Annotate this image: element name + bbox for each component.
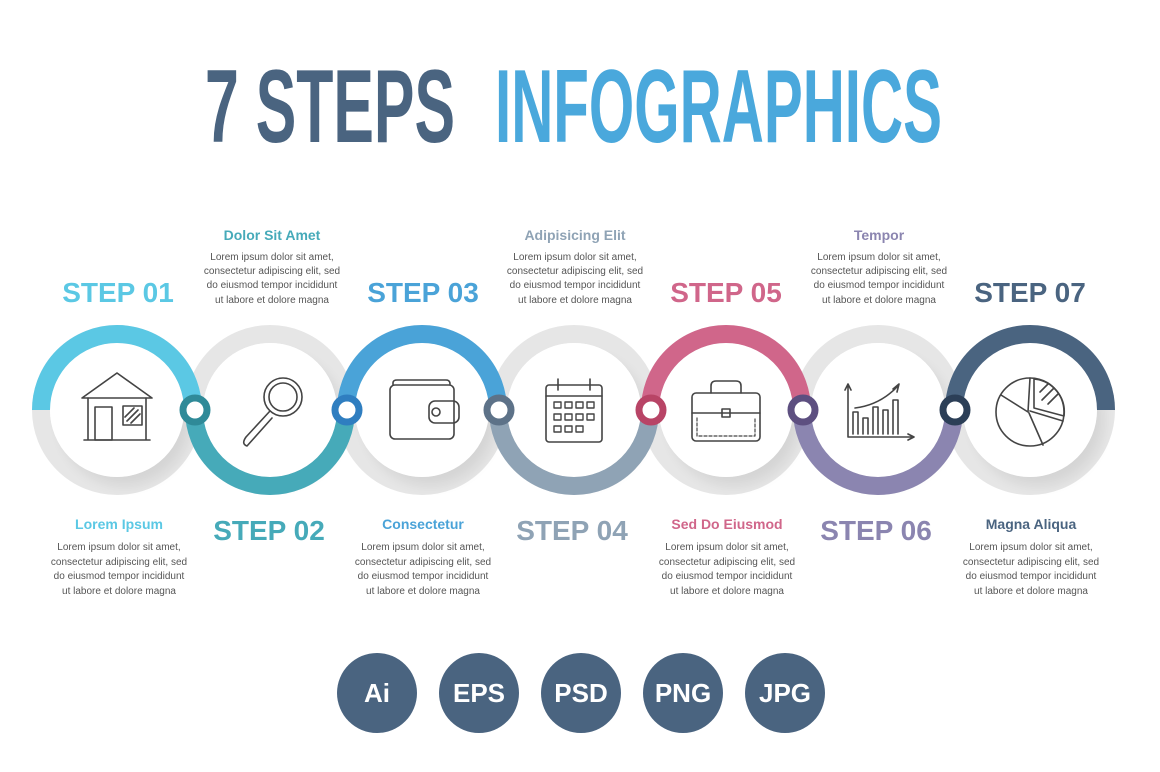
text: step 5: do eiusmod tempor incididunt — [662, 571, 793, 582]
text: step 5: ut labore et dolore magna — [670, 586, 784, 597]
icon: calendar — [546, 379, 602, 442]
step labels: STEP 07 — [974, 277, 1086, 308]
text: step 3: do eiusmod tempor incididunt — [358, 571, 489, 582]
text: step 2: Lorem ipsum dolor sit amet, — [210, 252, 334, 263]
text: step 1: consectetur adipiscing elit, sed — [51, 557, 187, 568]
text: step 6: ut labore et dolore magna — [822, 295, 936, 306]
title: 7 STEPS — [205, 49, 455, 165]
format badges: EPS — [453, 678, 505, 708]
text: step 1: do eiusmod tempor incididunt — [54, 571, 185, 582]
text: step 2: ut labore et dolore magna — [215, 295, 329, 306]
text: step 2: Dolor Sit Amet — [224, 227, 321, 243]
icon: growth chart — [845, 384, 914, 440]
text: step 6: Lorem ipsum dolor sit amet, — [817, 252, 941, 263]
text: step 7 — [963, 516, 1099, 597]
step labels: STEP 03 — [367, 277, 479, 308]
icon: house — [82, 373, 152, 440]
icon: magnifier — [244, 378, 302, 446]
step labels: STEP 01 — [62, 277, 174, 308]
text: step 6 — [811, 227, 947, 306]
text: step 2: do eiusmod tempor incididunt — [207, 280, 338, 291]
step labels: STEP 06 — [820, 515, 932, 546]
text: step 4: ut labore et dolore magna — [518, 295, 632, 306]
text: step 6: consectetur adipiscing elit, sed — [811, 266, 947, 277]
step labels: STEP 05 — [670, 277, 782, 308]
text: step 1: Lorem ipsum dolor sit amet, — [57, 542, 181, 553]
format badges: Ai — [364, 678, 390, 708]
text: step 7: consectetur adipiscing elit, sed — [963, 557, 1099, 568]
text: step 5: Lorem ipsum dolor sit amet, — [665, 542, 789, 553]
format badges: PSD — [554, 678, 608, 708]
text: step 3: Lorem ipsum dolor sit amet, — [361, 542, 485, 553]
text: step 5: consectetur adipiscing elit, sed — [659, 557, 795, 568]
text: step 7: ut labore et dolore magna — [974, 586, 1088, 597]
text: step 3 — [355, 516, 491, 597]
connectors — [183, 398, 967, 422]
format badges: JPG — [759, 678, 811, 708]
format badges — [337, 653, 825, 733]
text: step 1 — [51, 516, 187, 597]
icon: wallet — [390, 380, 459, 439]
format badges: PNG — [655, 678, 711, 708]
text: step 7: do eiusmod tempor incididunt — [966, 571, 1097, 582]
text: step 7: Magna Aliqua — [986, 516, 1076, 532]
step labels: STEP 02 — [213, 515, 325, 546]
text: step 4: consectetur adipiscing elit, sed — [507, 266, 643, 277]
title — [205, 49, 942, 165]
text: step 4: Adipisicing Elit — [524, 227, 626, 243]
text: step 5: Sed Do Eiusmod — [671, 516, 783, 532]
text: step 2: consectetur adipiscing elit, sed — [204, 266, 340, 277]
text: step 4: Lorem ipsum dolor sit amet, — [513, 252, 637, 263]
icon: briefcase — [692, 381, 760, 441]
text: step 3: ut labore et dolore magna — [366, 586, 480, 597]
icon: pie chart — [996, 378, 1064, 446]
text: step 2 — [204, 227, 340, 306]
text: step 1: ut labore et dolore magna — [62, 586, 176, 597]
step labels: STEP 04 — [516, 515, 628, 546]
text: step 4: do eiusmod tempor incididunt — [510, 280, 641, 291]
text: step 3: Consectetur — [382, 516, 464, 532]
text: step 6: do eiusmod tempor incididunt — [814, 280, 945, 291]
step labels — [62, 277, 1086, 546]
text: step 6: Tempor — [854, 227, 905, 243]
steps ring chain — [41, 334, 1106, 486]
text: step 3: consectetur adipiscing elit, sed — [355, 557, 491, 568]
text: step 5 — [659, 516, 795, 597]
text: step 4 — [507, 227, 643, 306]
text: step 1: Lorem Ipsum — [75, 516, 163, 532]
text: step 7: Lorem ipsum dolor sit amet, — [969, 542, 1093, 553]
